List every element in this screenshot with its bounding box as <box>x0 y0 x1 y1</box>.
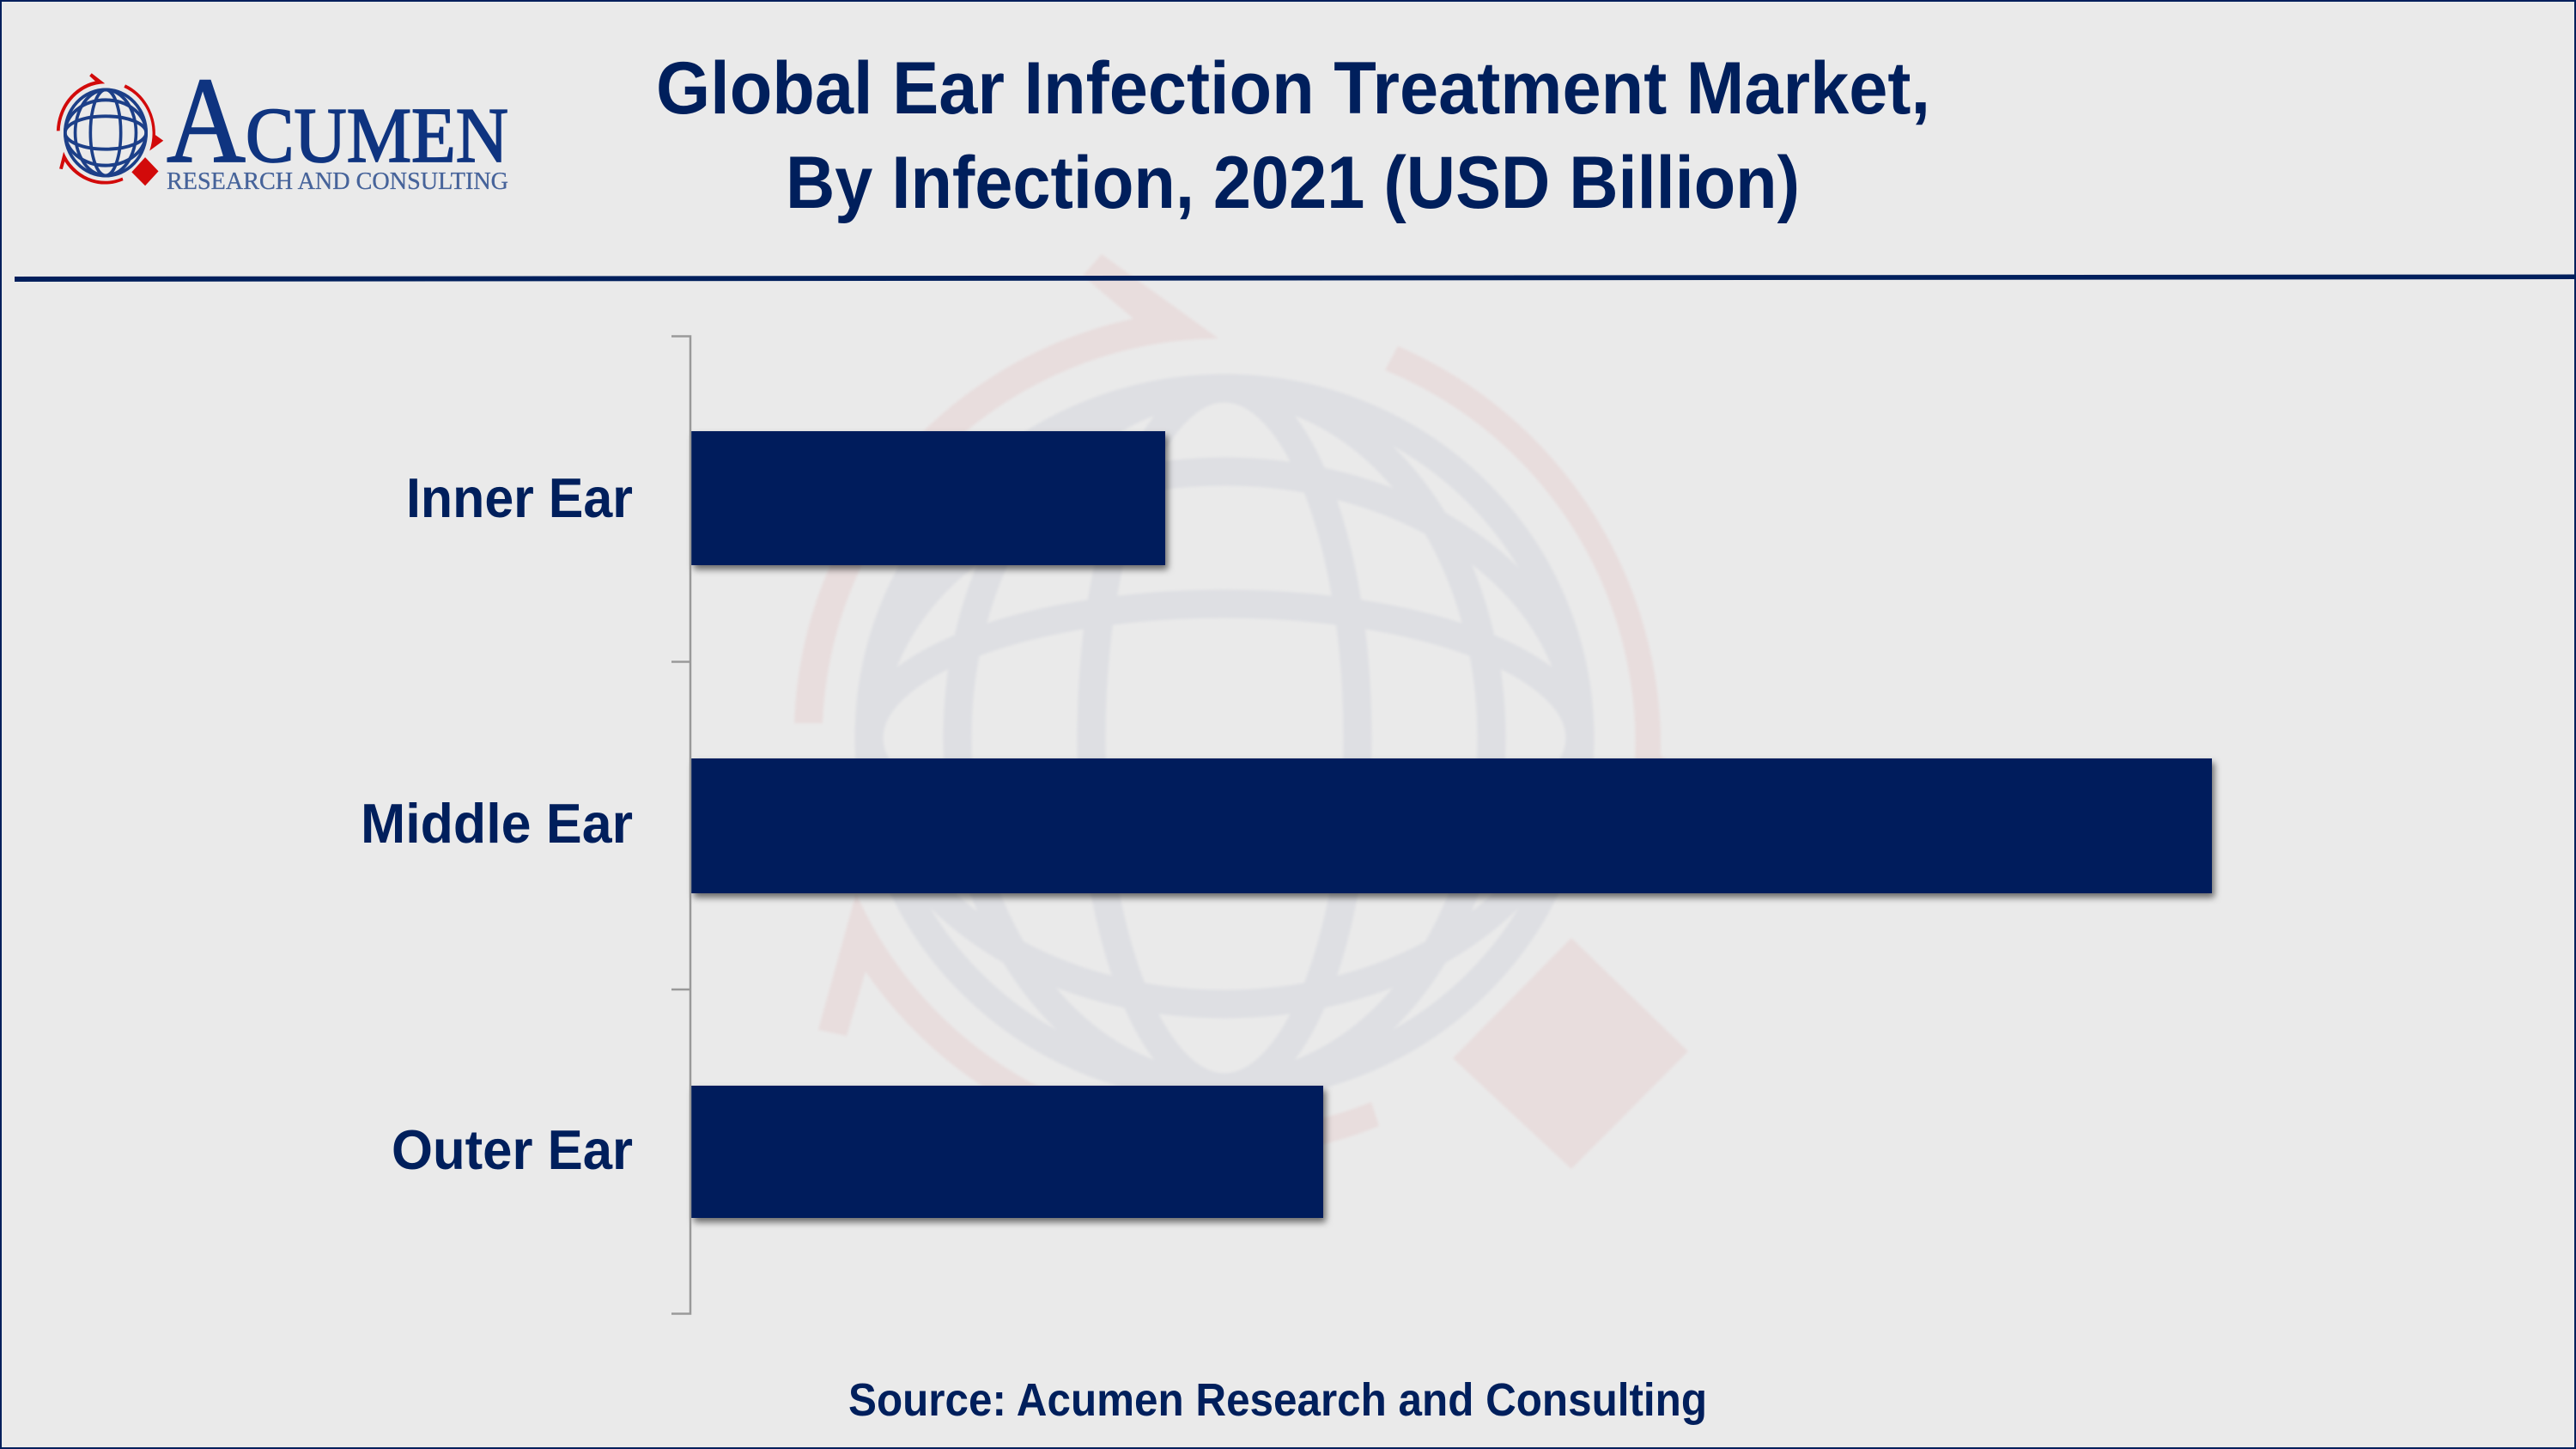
watermark: right arrow <box>1385 346 1731 885</box>
axis <box>671 337 690 1314</box>
logo tagline: RESEARCH AND CONSULTING <box>167 167 508 195</box>
label: Middle Ear: Middle Ear <box>361 792 633 855</box>
label: Outer Ear: Outer Ear <box>392 1118 633 1181</box>
label: Inner Ear: Inner Ear <box>406 466 633 529</box>
watermark: diamond <box>1453 938 1688 1169</box>
title line 2: By Infection, 2021 (USD Billion) <box>786 142 1800 224</box>
logo <box>57 52 508 195</box>
source: Source: Acumen Research and Consulting <box>848 1374 1707 1426</box>
bar: Middle Ear <box>691 758 2212 893</box>
watermark: top-left arrow <box>794 254 1218 723</box>
bar chart <box>361 337 2212 1314</box>
watermark: bottom arrow <box>818 893 1379 1157</box>
logo icon <box>57 73 163 186</box>
watermark: company logo <box>794 254 1731 1169</box>
title line 1: Global Ear Infection Treatment Market, <box>656 47 1930 130</box>
bar: Inner Ear <box>691 431 1165 565</box>
title <box>656 47 1930 224</box>
header divider line <box>15 275 2576 282</box>
watermark: globe <box>869 388 1580 1087</box>
bar: Outer Ear <box>691 1086 1323 1218</box>
logo wordmark: CUMEN <box>246 92 508 179</box>
logo wordmark: A <box>167 52 246 188</box>
